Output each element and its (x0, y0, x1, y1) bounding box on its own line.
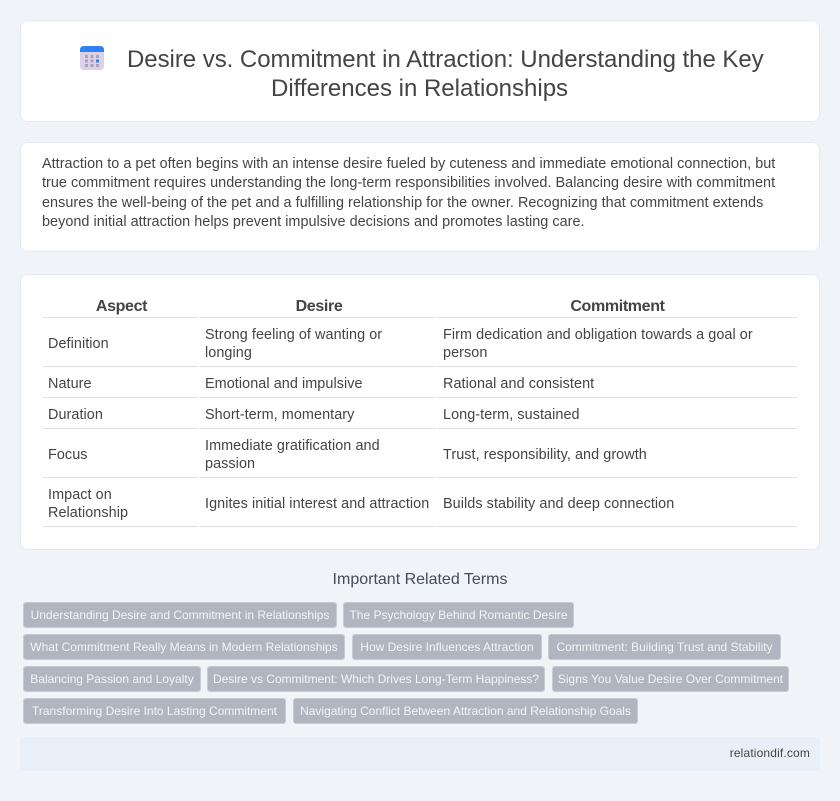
row: focus (48, 438, 647, 472)
icon: calendar (80, 46, 104, 70)
row: nature: Emotional and impulsive (205, 376, 363, 392)
row: duration (48, 407, 580, 423)
tag: Understanding Desire and Commitment in Relationships (31, 608, 329, 622)
tag (343, 602, 574, 628)
row: definition: Definition (48, 336, 109, 352)
tag: Signs You Value Desire Over Commitment (558, 672, 783, 686)
row: duration: Duration (48, 407, 103, 423)
table header: Aspect (96, 298, 147, 315)
row: definition: longing (205, 345, 252, 361)
row: definition: Firm dedication and obligation towards a goal or (443, 327, 753, 343)
tag (552, 666, 789, 692)
tag (548, 634, 781, 660)
tag (352, 634, 542, 660)
tag: Balancing Passion and Loyalty (30, 672, 194, 686)
row: focus: passion (205, 456, 255, 472)
row: duration: Short-term, momentary (205, 407, 354, 423)
row: nature (48, 376, 594, 392)
tag: Navigating Conflict Between Attraction and Relationship Goals (300, 704, 631, 718)
tag: Commitment: Building Trust and Stability (556, 640, 773, 654)
row: impact on relationship (48, 487, 674, 521)
tag (23, 634, 345, 660)
footer text: relationdif.com (730, 746, 810, 760)
panel: header (20, 20, 820, 122)
table header: Desire (296, 298, 342, 315)
text block: introduction: ensures the well-being of the pet and a fulfilling relationship for the owner. Recognizing that commitment extends (42, 195, 763, 211)
tag: The Psychology Behind Romantic Desire (349, 608, 568, 622)
row: definition (48, 327, 753, 361)
row: definition: person (443, 345, 487, 361)
table header (96, 298, 665, 315)
row: nature: Nature (48, 376, 92, 392)
row: focus: Immediate gratification and (205, 438, 380, 454)
row: nature: Rational and consistent (443, 376, 594, 392)
tag: Transforming Desire Into Lasting Commitment (32, 704, 277, 718)
row: focus: Trust, responsibility, and growth (443, 447, 647, 463)
title: Desire vs. Commitment in Attraction: Understanding the Key (127, 46, 764, 73)
title: Differences in Relationships (271, 75, 568, 102)
footer (20, 737, 820, 771)
tag: Desire vs Commitment: Which Drives Long-Term Happiness? (213, 672, 539, 686)
row: focus: Focus (48, 447, 88, 463)
tag: What Commitment Really Means in Modern Relationships (30, 640, 338, 654)
row: impact on relationship: Builds stability and deep connection (443, 496, 674, 512)
row: impact on relationship: Ignites initial interest and attraction (205, 496, 429, 512)
text block: introduction: beyond initial attraction helps prevent impulsive decisions and promotes lasting care. (42, 214, 585, 230)
text block: introduction: Attraction to a pet often begins with an intense desire fueled by cuteness and immediate emotional connection, but (42, 156, 775, 172)
tag (23, 666, 201, 692)
tag (23, 698, 286, 724)
table header: Commitment (570, 298, 665, 315)
panel: related term tags (23, 602, 789, 724)
tag (207, 666, 545, 692)
row: impact on relationship: Impact on (48, 487, 112, 503)
row: duration: Long-term, sustained (443, 407, 580, 423)
tag (293, 698, 638, 724)
panel: comparison table (20, 274, 820, 550)
tag: How Desire Influences Attraction (360, 640, 534, 654)
title (127, 46, 764, 102)
row: definition: Strong feeling of wanting or (205, 327, 382, 343)
panel: introduction (20, 142, 820, 252)
heading: important related terms: Important Related Terms (333, 571, 507, 588)
tag (23, 602, 337, 628)
row: impact on relationship: Relationship (48, 505, 128, 521)
text block: introduction (42, 156, 776, 230)
text block: introduction: true commitment requires understanding the long-term responsibilities involved. Balancing desire with commitment (42, 175, 775, 191)
